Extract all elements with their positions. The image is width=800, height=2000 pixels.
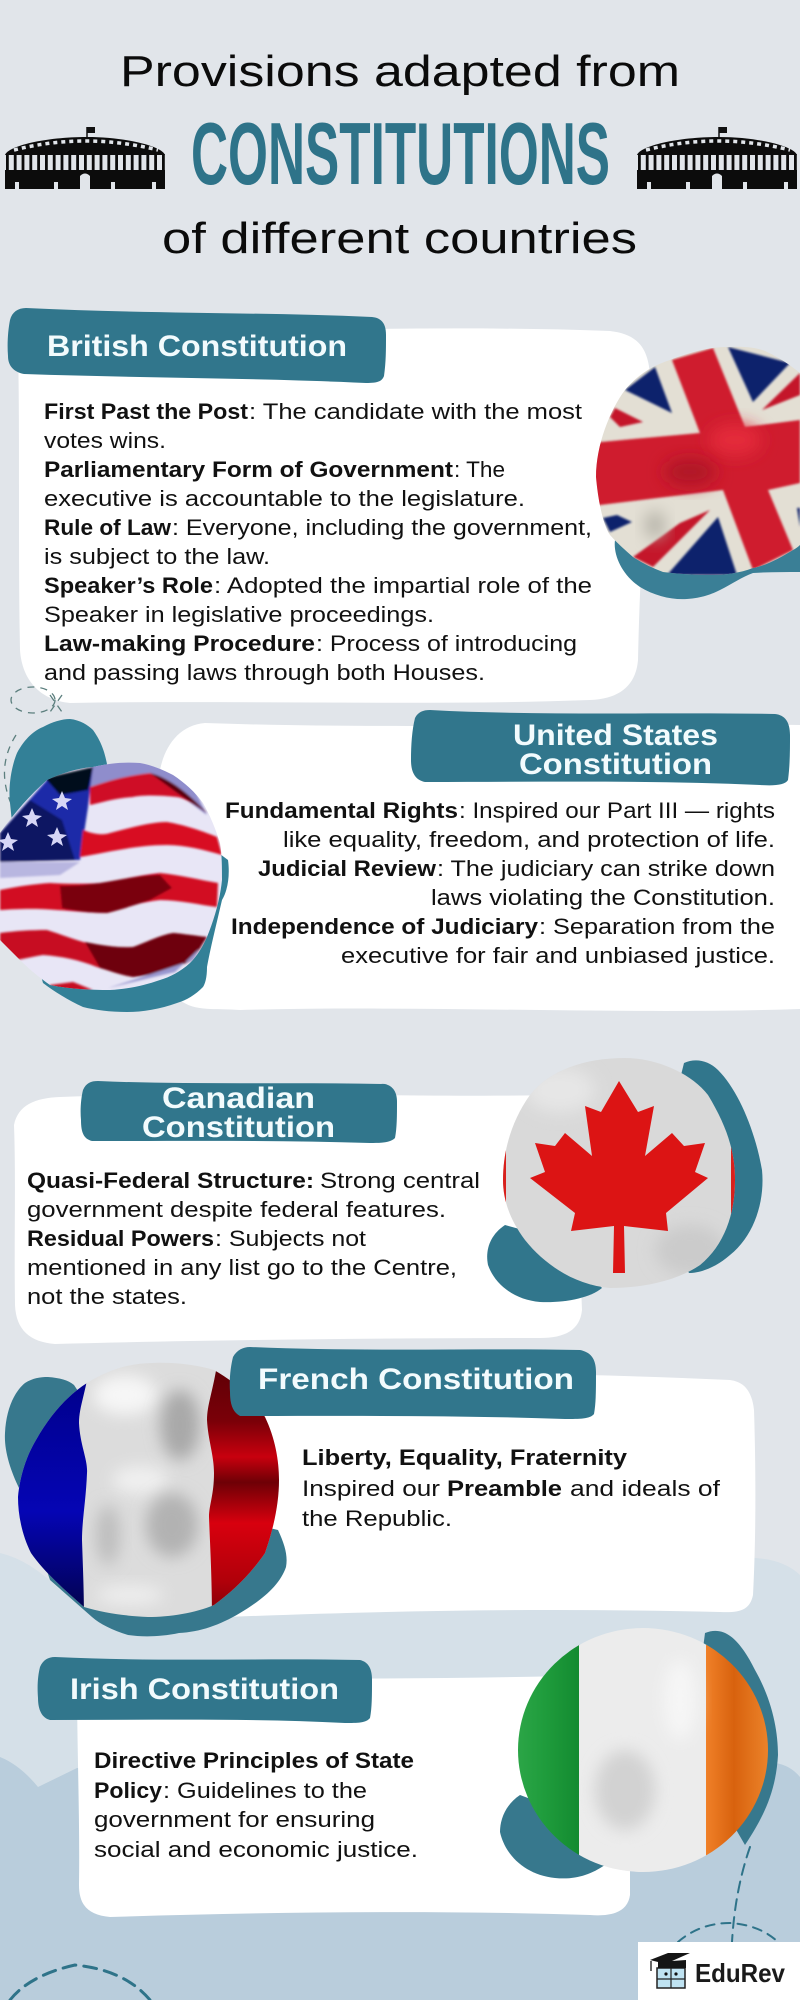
panel background — [18, 328, 650, 703]
text block: like equality, freedom, and protection of life. — [283, 827, 775, 852]
badge title: Canadian — [162, 1082, 315, 1115]
text block: and passing laws through both Houses. — [44, 660, 485, 685]
title line 3: of different countries — [162, 214, 637, 263]
badge title: British Constitution — [47, 330, 347, 363]
text block: executive for fair and unbiased justice. — [341, 943, 775, 968]
badge — [81, 1081, 397, 1143]
panel background — [77, 1675, 630, 1917]
text block: Quasi-Federal Structure: — [27, 1168, 314, 1193]
text block: : The — [454, 457, 505, 482]
text block: Residual Powers — [27, 1226, 214, 1251]
text block: : Adopted the impartial role of the — [214, 573, 592, 598]
text block: not the states. — [27, 1284, 187, 1309]
text block: Independence of Judiciary — [231, 914, 539, 939]
text block: laws violating the Constitution. — [431, 885, 775, 910]
badge — [38, 1657, 372, 1723]
icon: parliament right — [637, 127, 797, 189]
icon: parliament left — [5, 127, 165, 189]
text block: Speaker in legislative proceedings. — [44, 602, 434, 627]
text block — [225, 798, 775, 968]
text block — [44, 399, 592, 685]
badge title: Constitution — [519, 748, 712, 781]
text block: social and economic justice. — [94, 1837, 418, 1862]
text block: Parliamentary Form of Government — [44, 457, 454, 482]
badge — [411, 710, 790, 785]
text block: government despite federal features. — [27, 1197, 446, 1222]
text block: French: the Republic. — [302, 1506, 452, 1531]
decorative dashed arcs — [10, 1847, 778, 2000]
text block: executive is accountable to the legislature. — [44, 486, 525, 511]
text block: Law-making Procedure — [44, 631, 315, 656]
panel: United States — [160, 710, 800, 1011]
title line 1: Provisions adapted from — [120, 47, 680, 96]
text block: : Subjects not — [215, 1226, 367, 1251]
badge title — [513, 719, 718, 781]
text block — [27, 1168, 480, 1309]
badge title: Constitution — [142, 1111, 335, 1144]
badge title: French Constitution — [258, 1363, 574, 1396]
text block: First Past the Post — [44, 399, 249, 424]
badge title: Irish Constitution — [70, 1673, 339, 1706]
panel: Canadian — [14, 1081, 582, 1344]
icon: graduation cap mascot — [650, 1953, 690, 1988]
badge — [8, 308, 386, 383]
icon: Canadian flag with teal blobs — [487, 1055, 763, 1302]
decorative dashed circle — [4, 687, 62, 810]
logo text: EduRev — [695, 1958, 785, 1988]
text block: French: Liberty, Equality, Fraternity — [302, 1445, 628, 1470]
badge title — [142, 1082, 335, 1144]
icon: UK flag with teal blob — [590, 340, 800, 599]
text block: : The candidate with the most — [249, 399, 583, 424]
text block: : Everyone, including the government, — [172, 515, 592, 540]
text block: French: Inspired our — [302, 1476, 441, 1501]
text block: : Separation from the — [539, 914, 775, 939]
text block: French: Preamble — [447, 1476, 562, 1501]
text block: Speaker’s Role — [44, 573, 213, 598]
icon: Irish flag with teal blobs — [500, 1620, 778, 1880]
text block: Strong central — [320, 1168, 480, 1193]
text block: : The judiciary can strike down — [437, 856, 775, 881]
text block: is subject to the law. — [44, 544, 270, 569]
text block: French: and ideals of — [570, 1476, 721, 1501]
panel: British — [8, 308, 650, 703]
panel background — [160, 723, 800, 1011]
text block: mentioned in any list go to the Centre, — [27, 1255, 457, 1280]
text block: French — [302, 1445, 721, 1531]
panel: French — [200, 1374, 755, 1618]
panel: Irish — [38, 1657, 630, 1917]
text block: Directive Principles of State — [94, 1748, 414, 1773]
panel background — [200, 1374, 755, 1618]
badge title: United States — [513, 719, 718, 752]
text block: Judicial Review — [258, 856, 437, 881]
panel background — [14, 1094, 582, 1344]
text block: Rule of Law — [44, 515, 171, 540]
text block: government for ensuring — [94, 1807, 375, 1832]
icon: French flag with teal blob — [5, 1355, 287, 1636]
icon: US flag with teal blob — [0, 719, 230, 1012]
text block: : Inspired our Part III — rights — [459, 798, 775, 823]
text block: : Process of introducing — [316, 631, 577, 656]
badge: French — [230, 1347, 596, 1419]
text block: Policy — [94, 1778, 162, 1803]
text block — [94, 1748, 418, 1862]
EduRev logo box — [638, 1942, 800, 2000]
text block: : Guidelines to the — [163, 1778, 367, 1803]
text block: votes wins. — [44, 428, 166, 453]
text block: Fundamental Rights — [225, 798, 458, 823]
